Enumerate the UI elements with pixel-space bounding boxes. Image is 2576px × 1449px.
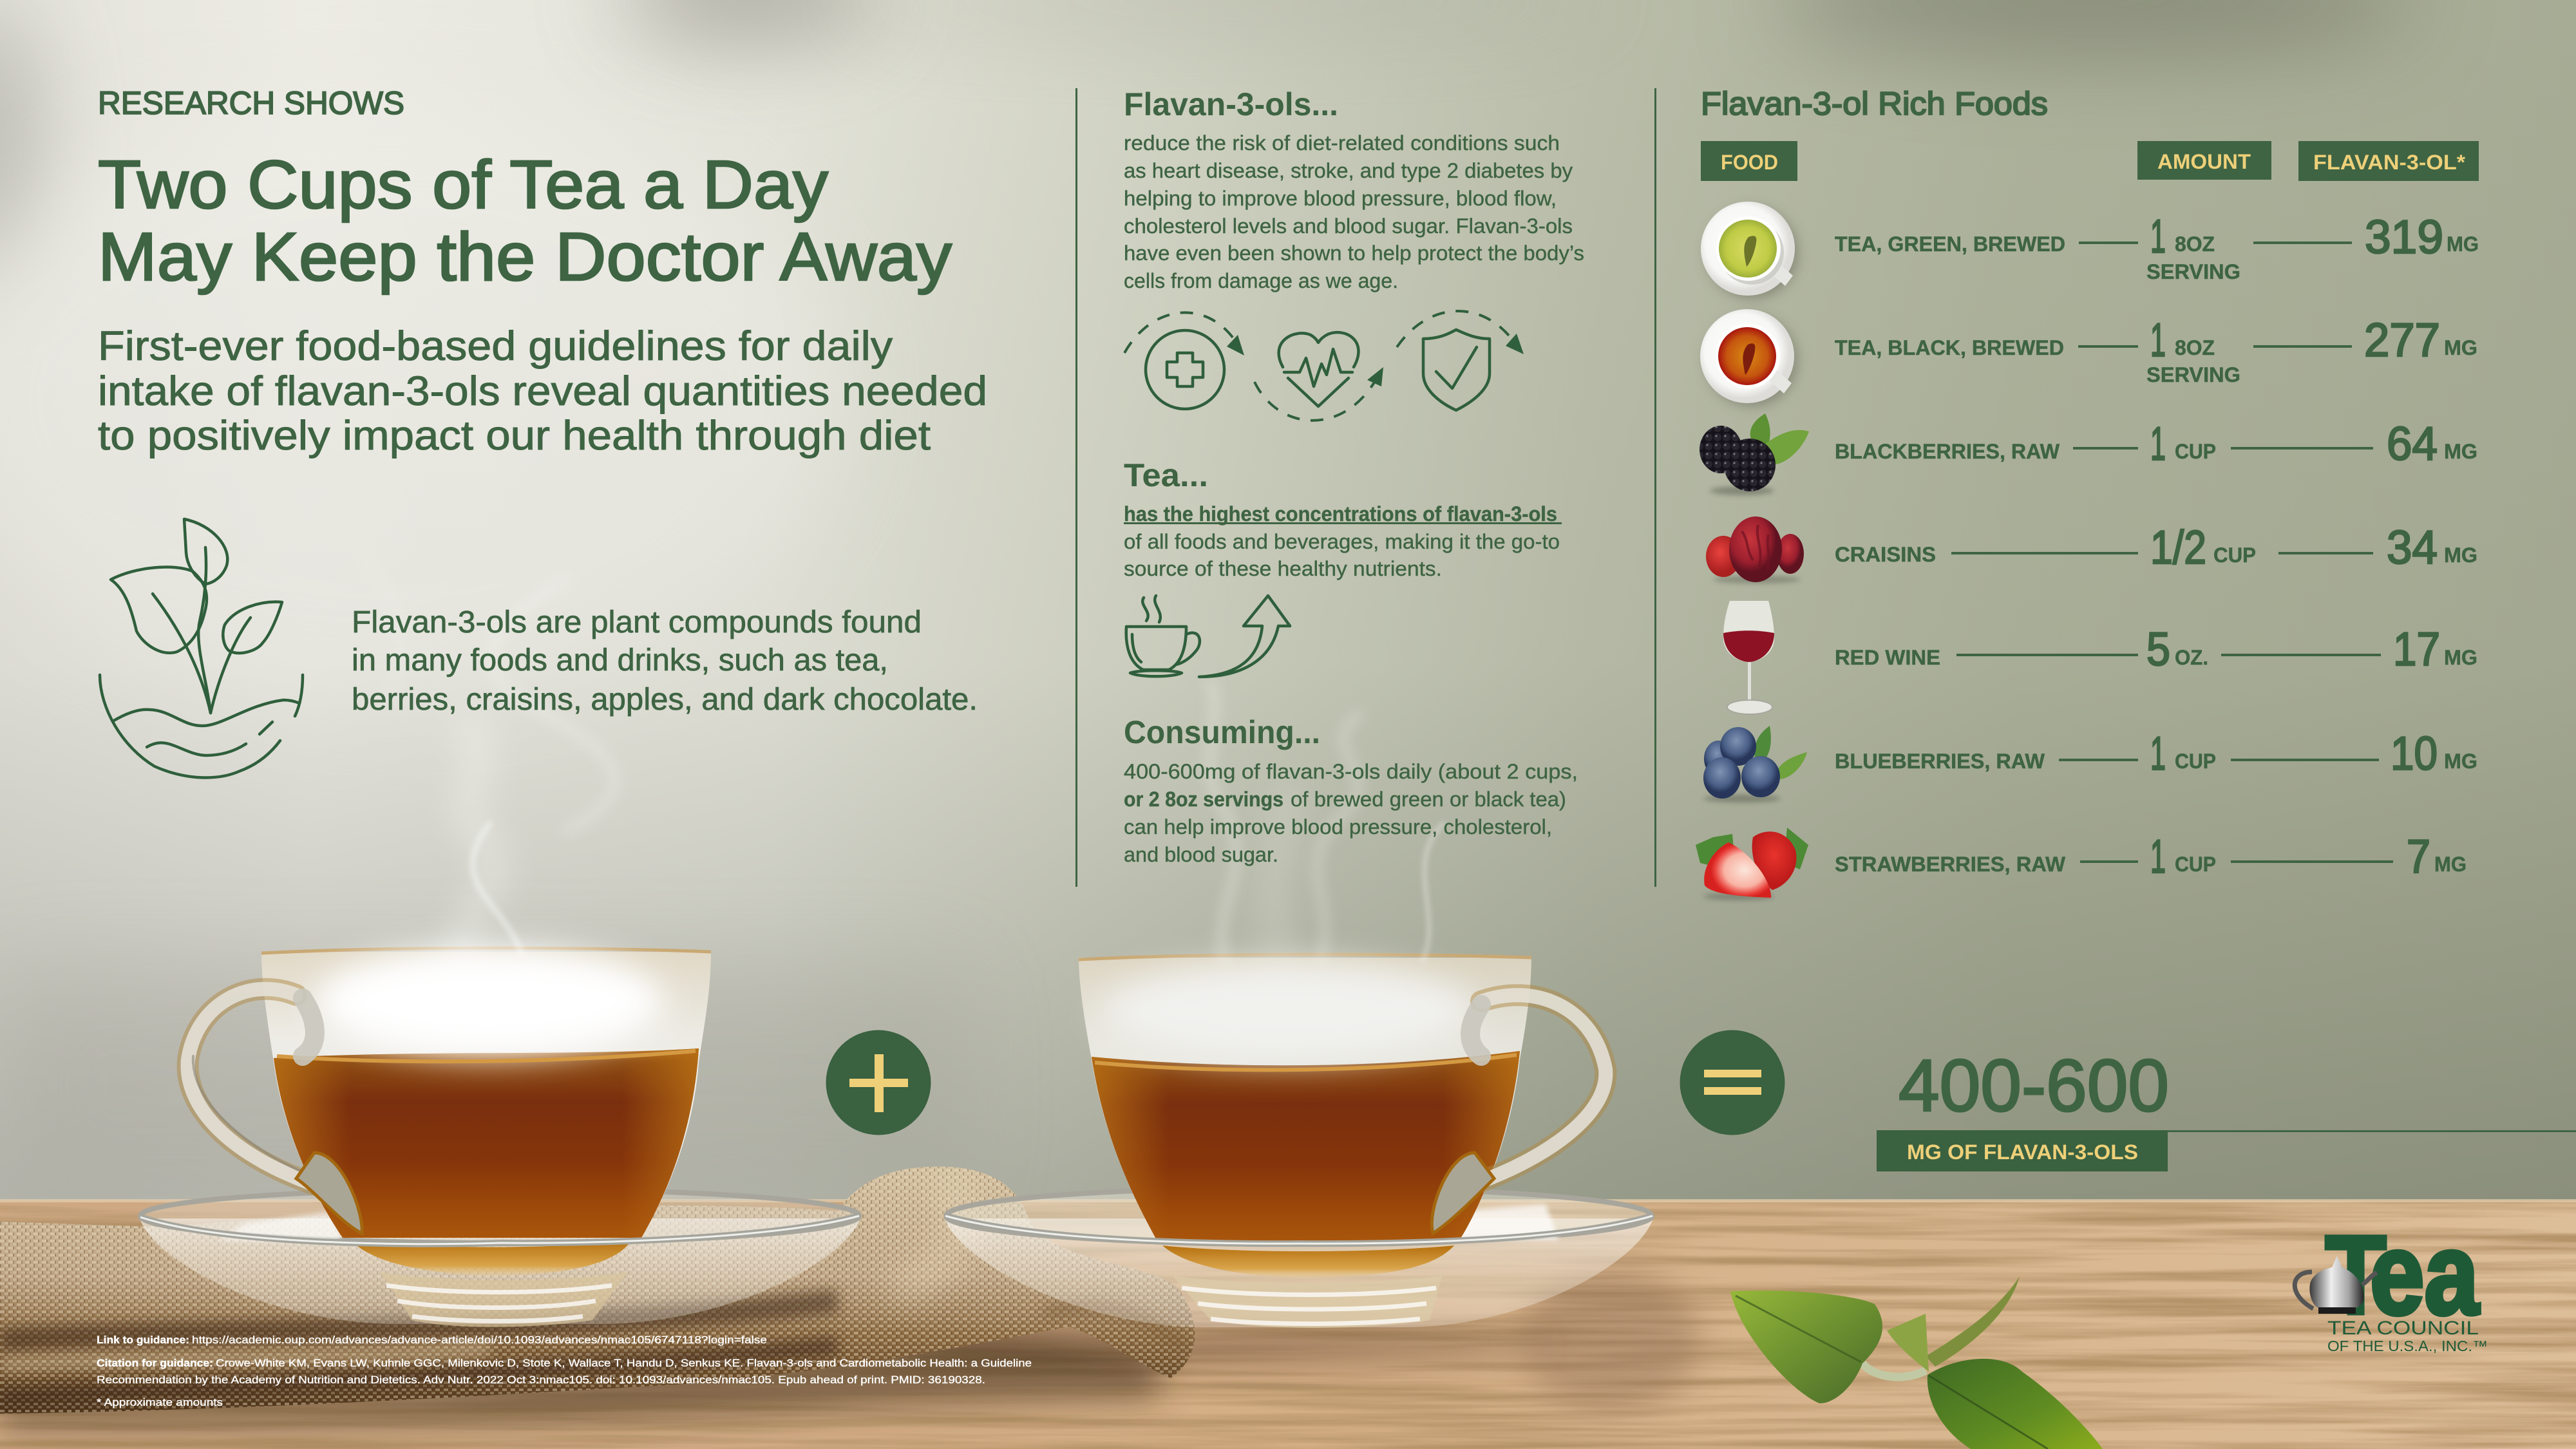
row: blackberries <box>1700 413 2477 495</box>
leader <box>2059 759 2138 761</box>
left leaf vein <box>1736 1296 1861 1362</box>
footnotes: Recommendation by the Academy of Nutrition and Dietetics. Adv Nutr. 2022 Oct 3:nmac105. doi: 10.1093/advances/nmac105. Epub ahead of print. PMID: 36190328. <box>97 1374 985 1386</box>
right leaf <box>1927 1359 2103 1449</box>
flavan value: 64 <box>2387 418 2438 470</box>
heading: consuming: Consuming... <box>1124 714 1320 750</box>
cup two tea <box>1092 1051 1520 1242</box>
cup one tea <box>274 1048 699 1238</box>
result rule <box>2168 1130 2576 1132</box>
leader <box>2253 345 2352 348</box>
leader <box>1951 552 2138 554</box>
amount <box>2150 831 2216 883</box>
icon: equals badge <box>1680 1030 1785 1135</box>
cup two glass body <box>1079 958 1531 1242</box>
flavan value <box>2387 418 2477 470</box>
flavan value <box>2364 314 2477 366</box>
body: tea concentrations <box>1124 502 1562 580</box>
panel: flavan-3-ol rich foods table <box>1696 86 2479 900</box>
amount: 5 <box>2146 623 2170 676</box>
tea cup two <box>1079 954 1605 1242</box>
flavan value: 17 <box>2393 623 2440 676</box>
flavan value: MG <box>2444 750 2477 773</box>
bud <box>1887 1314 1929 1372</box>
amount: CUP <box>2175 750 2216 773</box>
text: what flavan-3-ols are: berries, craisins, apples, and dark chocolate. <box>352 683 978 717</box>
saucer two, front with amber reflection <box>945 1216 1653 1328</box>
text: what flavan-3-ols are: Flavan-3-ols are plant compounds found <box>352 605 922 639</box>
cup two handle foot <box>1432 1153 1494 1233</box>
body: recommended intake: 400-600mg of flavan-3-ols daily (about 2 cups, <box>1124 760 1578 783</box>
leader <box>1956 654 2138 656</box>
text: what flavan-3-ols are <box>352 605 978 717</box>
leader <box>2231 860 2393 863</box>
title <box>98 147 952 295</box>
cup one fog highlight <box>316 947 663 1056</box>
logo subtitle: OF THE U.S.A., INC.™ <box>2327 1338 2488 1354</box>
wooden table <box>0 1199 2576 1449</box>
cup two handle <box>1470 995 1605 1185</box>
row: blueberries <box>1703 726 2477 802</box>
title: Two Cups of Tea a Day <box>98 147 828 223</box>
amount: 1 <box>2150 831 2166 883</box>
body: recommended intake: and blood sugar. <box>1124 843 1278 866</box>
flavan value: MG <box>2444 646 2477 669</box>
footnotes <box>97 1334 1032 1408</box>
amount: 1/2 <box>2150 522 2206 574</box>
panel: flavan-3-ols and tea facts <box>1124 86 1584 866</box>
flavan value: 10 <box>2391 728 2438 780</box>
flavan value <box>2407 831 2467 883</box>
steam <box>361 554 1443 966</box>
footnotes: https://academic.oup.com/advances/advance-article/doi/10.1093/advances/nmac105/6747118?login=false <box>192 1334 767 1346</box>
column header: flavan-3-ol: FLAVAN-3-OL* <box>2313 151 2466 174</box>
flavan value: 277 <box>2364 314 2440 366</box>
flavan value: MG <box>2444 544 2477 567</box>
body: recommended intake: of brewed green or black tea) <box>1291 788 1566 811</box>
saucer two, back <box>945 1188 1653 1327</box>
logo wordmark letters: ea <box>2370 1209 2480 1339</box>
flavan value: MG <box>2434 853 2467 876</box>
flavan value: 7 <box>2407 831 2430 883</box>
column header: food <box>1701 141 1797 181</box>
logo name: TEA COUNCIL <box>2327 1318 2479 1339</box>
leader <box>2080 860 2138 863</box>
icon: cup with upward arrow <box>1126 596 1290 677</box>
logo: tea council <box>2295 1209 2488 1354</box>
right leaf vein <box>1929 1376 2048 1449</box>
column header: food: FOOD <box>1721 151 1778 174</box>
burlap cloth <box>0 1162 1211 1426</box>
cup two tea edge glow <box>1092 1051 1520 1242</box>
body: health benefits <box>1124 131 1584 292</box>
amount: 1 <box>2150 728 2166 780</box>
text: what flavan-3-ols are: in many foods and drinks, such as tea, <box>352 643 888 677</box>
amount <box>2146 623 2208 676</box>
flavan value <box>2365 211 2479 263</box>
flavan value <box>2387 522 2477 574</box>
result: 400-600 mg <box>1877 1045 2576 1171</box>
cup two rim <box>1079 954 1531 960</box>
amount <box>2146 314 2240 386</box>
amount <box>2146 211 2240 283</box>
column header: amount <box>2137 141 2271 180</box>
icon: plant sprout in soil <box>100 519 303 777</box>
subtitle: intake of flavan-3-ols reveal quantities needed <box>98 368 987 414</box>
body: health benefits: helping to improve blood pressure, blood flow, <box>1124 187 1557 210</box>
icon: green tea cup <box>1701 202 1797 298</box>
row: red wine <box>1723 601 2477 714</box>
body: health benefits: as heart disease, stroke, and type 2 diabetes by <box>1124 159 1573 182</box>
body: tea concentrations: of all foods and beverages, making it the go-to <box>1124 530 1560 553</box>
result label: MG OF FLAVAN-3-OLS <box>1907 1141 2138 1164</box>
column header: flavan-3-ol <box>2298 141 2479 181</box>
cup two fog highlight <box>1101 963 1475 1059</box>
amount <box>2150 522 2256 574</box>
logo teapot <box>2295 1256 2377 1314</box>
amount: CUP <box>2175 440 2216 463</box>
label: RED WINE <box>1835 646 1940 669</box>
footnotes: * Approximate amounts <box>97 1396 223 1408</box>
amount: OZ. <box>2175 646 2208 669</box>
footnotes: Citation for guidance: <box>97 1357 213 1369</box>
cup two surface line <box>1095 1055 1517 1070</box>
heading: tea: Tea... <box>1124 457 1208 493</box>
amount: CUP <box>2175 853 2216 876</box>
amount: CUP <box>2213 544 2256 567</box>
tea cup one <box>188 947 711 1238</box>
label: BLACKBERRIES, RAW <box>1835 440 2060 463</box>
leader <box>2253 242 2352 244</box>
flavan value: MG <box>2444 336 2477 359</box>
amount: 1 <box>2150 314 2166 366</box>
footnotes: Crowe-White KM, Evans LW, Kuhnle GGC, Milenkovic D, Stote K, Wallace T, Handu D, Senkus KE. Flavan-3-ols and Cardiometabolic Health: a Guideline <box>216 1357 1032 1369</box>
body: health benefits: reduce the risk of diet-related conditions such <box>1124 131 1560 155</box>
body: recommended intake: or 2 8oz servings <box>1124 788 1283 811</box>
cup one rim <box>261 948 711 953</box>
body: recommended intake: can help improve blood pressure, cholesterol, <box>1124 815 1552 838</box>
flavan value <box>2393 623 2477 676</box>
leader <box>2078 345 2138 348</box>
stem <box>1862 1363 1926 1377</box>
cup one handle <box>188 989 316 1185</box>
amount <box>2150 728 2216 780</box>
icon: black tea cup <box>1700 309 1797 406</box>
label: CRAISINS <box>1835 543 1936 566</box>
amount: SERVING <box>2146 363 2240 386</box>
title: May Keep the Doctor Away <box>98 219 952 295</box>
row: green tea <box>1701 202 2479 298</box>
cup one surface line <box>277 1051 696 1061</box>
flavan value <box>2391 728 2477 780</box>
table heading: Flavan-3-ol Rich Foods <box>1701 86 2048 122</box>
leader <box>2278 552 2373 554</box>
logo wordmark: T <box>2325 1213 2387 1338</box>
amount: 8OZ <box>2175 336 2215 359</box>
amount: 1 <box>2150 418 2166 470</box>
leader <box>2221 654 2381 656</box>
leaves on table <box>1730 1276 2103 1449</box>
subtitle <box>98 323 987 459</box>
body: health benefits: cells from damage as we age. <box>1124 269 1398 292</box>
tagline: research shows: RESEARCH SHOWS <box>98 85 404 121</box>
saucer one, front with amber reflection <box>140 1216 859 1327</box>
cup one handle foot <box>296 1153 362 1233</box>
flavan value: 34 <box>2387 522 2438 574</box>
cup one glass body <box>261 952 711 1238</box>
footnotes: Link to guidance: <box>97 1334 189 1346</box>
icon: craisins <box>1706 516 1804 583</box>
row: strawberries <box>1696 828 2467 900</box>
amount <box>2150 418 2216 470</box>
body: tea concentrations: has the highest concentrations of flavan-3-ols <box>1124 502 1557 526</box>
sprout leaf <box>1926 1276 2020 1367</box>
column header: amount: AMOUNT <box>2157 150 2251 173</box>
heading: flavan-3-ols: Flavan-3-ols... <box>1124 86 1338 122</box>
divider lines <box>1075 88 1656 887</box>
row: craisins <box>1706 516 2477 583</box>
left leaf <box>1730 1291 1882 1403</box>
body: health benefits: cholesterol levels and blood sugar. Flavan-3-ols <box>1124 214 1573 238</box>
saucer one, back <box>140 1189 860 1324</box>
leader <box>2073 447 2138 450</box>
leader <box>2231 759 2379 761</box>
leader <box>2231 447 2373 450</box>
amount: 1 <box>2150 211 2166 263</box>
amount: 8OZ <box>2175 232 2215 256</box>
body: health benefits: have even been shown to help protect the body’s <box>1124 242 1584 265</box>
label: TEA, BLACK, BREWED <box>1835 336 2064 359</box>
icons: health cross, heart, shield with dashed arrows <box>1124 311 1524 421</box>
result label <box>1877 1130 2168 1171</box>
subtitle: First-ever food-based guidelines for daily <box>98 323 893 369</box>
result number: 400-600 <box>1899 1045 2169 1127</box>
row: black tea <box>1700 309 2477 406</box>
icon: blackberries <box>1700 413 1809 495</box>
label: STRAWBERRIES, RAW <box>1835 853 2066 876</box>
subtitle: to positively impact our health through diet <box>98 412 931 459</box>
leader <box>2079 242 2138 244</box>
icon: strawberries <box>1696 828 1808 900</box>
icon: blueberries <box>1703 726 1807 802</box>
flavan value: 319 <box>2365 211 2443 263</box>
body: recommended intake <box>1124 760 1578 866</box>
cup one tea edge glow <box>274 1048 699 1238</box>
flavan value: MG <box>2447 232 2479 256</box>
label: TEA, GREEN, BREWED <box>1835 232 2065 256</box>
icon: plus badge <box>826 1030 931 1135</box>
amount: SERVING <box>2146 260 2240 283</box>
icon: wine glass <box>1723 601 1774 714</box>
flavan value: MG <box>2444 440 2477 463</box>
body: tea concentrations: source of these healthy nutrients. <box>1124 557 1442 580</box>
label: BLUEBERRIES, RAW <box>1835 750 2045 773</box>
